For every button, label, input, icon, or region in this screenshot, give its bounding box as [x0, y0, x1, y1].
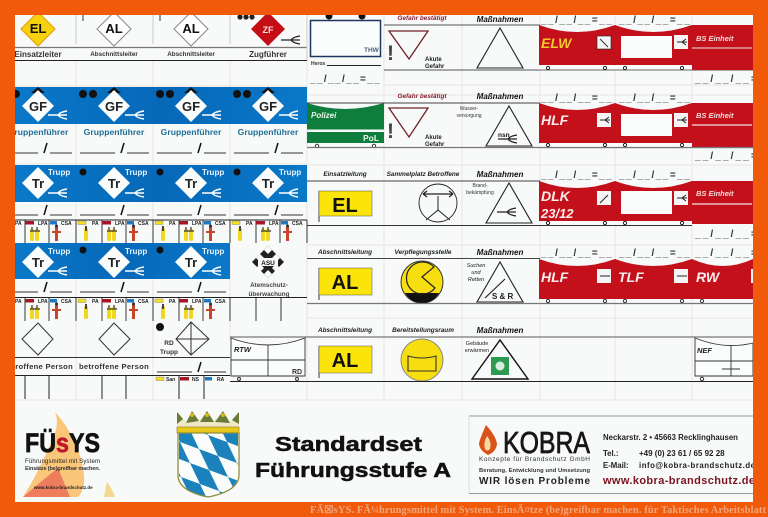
panel: equipment legend row 1: PA [169, 221, 176, 227]
panel: Trupp row 2 [3, 243, 230, 292]
logo: KOBRA block: Beratung, Entwicklung und Umsetzung [479, 468, 590, 474]
logo: FüSYS: FÜsYS [25, 428, 100, 458]
icon: AL diamond: AL [105, 21, 123, 36]
panel: danger block 2: Gefahr [425, 142, 445, 148]
logo: FüSYS: Einsätze (be)greifbar machen. [25, 466, 100, 472]
panel: equipment legend row 1: CSA [138, 221, 149, 227]
icon: AL flag 2: AL [332, 350, 358, 372]
panel: Einsatzleitung block: Sammelplatz Betroffene [387, 171, 460, 178]
panel: equipment legend row 1: CSA [292, 221, 303, 227]
icon: ASU checker diamond: ASU [261, 260, 275, 267]
icon: Trupp 5 [22, 246, 70, 278]
panel: danger block 1: Gefahr bestätigt [397, 15, 447, 22]
panel: HLF vehicle: __/__/__=__ [618, 93, 690, 104]
panel: betroffene Person row [3, 323, 230, 399]
panel: equipment legend row 2: PA [15, 299, 22, 305]
icon: GF 1 [22, 87, 67, 122]
panel: HLF TLF RW vehicles: HLF [541, 269, 569, 285]
panel: danger block 2: nsn [498, 132, 510, 139]
icon: Trupp 6: Tr [108, 255, 120, 270]
panel: RD Trupp: Trupp [160, 349, 178, 356]
logo: FüSYS: www.kobra-brandschutz.de [33, 485, 93, 490]
panel: equipment legend row 2: CSA [215, 299, 226, 305]
icon: person diamond 1 [22, 323, 53, 355]
panel: danger block 2: ! [387, 120, 394, 143]
icon: AL flag 2 [319, 346, 372, 378]
logo: KOBRA block: Konzepte für Brandschutz GmbH [479, 456, 590, 463]
icon: Sammelplatz circle [419, 184, 457, 222]
panel: HLF vehicle: __/__/__= [694, 151, 757, 162]
panel: RTW vehicle: RTW [234, 345, 252, 354]
icon: Trupp 4 [234, 167, 301, 199]
logo: KOBRA block: +49 (0) 23 61 / 65 92 28 [639, 449, 725, 458]
icon: Trupp 1 [22, 167, 70, 199]
icon: AL diamond 2: AL [182, 21, 200, 36]
panel: equipment legend row 2: CSA [61, 299, 72, 305]
panel: HLF TLF RW vehicles [539, 248, 757, 303]
logo: FüSYS: Führungsmittel mit System [25, 459, 100, 465]
icon: Trupp 5: Tr [32, 255, 44, 270]
text: Abschnittsleiter 2: Abschnittsleiter [167, 51, 215, 58]
panel: DLK vehicle: DLK [541, 188, 570, 204]
panel: equipment legend row 2: LPA [38, 299, 48, 305]
panel: RD Trupp: RD [164, 340, 174, 347]
icon: EL flag [319, 191, 372, 222]
logo: KOBRA block: Tel.: [603, 449, 618, 458]
panel: Polizei vehicle [307, 103, 384, 148]
panel: RD Trupp: San [166, 377, 175, 383]
icon: GF 3 [156, 87, 221, 122]
text: Gruppenführer labels [8, 127, 299, 137]
icon: GF 4: GF [259, 99, 277, 114]
panel: top leader row [14, 12, 307, 60]
icon: Trupp 3 [156, 167, 224, 199]
icon: GF 3: GF [182, 99, 200, 114]
icon: GF 1: GF [29, 99, 47, 114]
panel: Einsatzleitung block [307, 170, 540, 226]
panel: Abschnittsleitung block 2: Bereitstellungsraum [392, 327, 454, 334]
logo: FüSYS [23, 412, 115, 497]
panel: danger block 2: Gefahr bestätigt [397, 93, 447, 100]
icon: ASU checker diamond [252, 246, 284, 278]
panel: HLF TLF RW vehicles: RW [696, 269, 721, 285]
panel: equipment legend row 1: PA [15, 221, 22, 227]
panel: ELW vehicle [539, 15, 757, 85]
panel: danger block 1: ! [387, 42, 394, 65]
panel: Abschnittsleitung block 1: Suchen [467, 263, 485, 269]
panel: equipment legend row 1: LPA [115, 221, 125, 227]
panel: ELW vehicle: __/__/__=__ [618, 15, 690, 26]
panel: RD Trupp: RA [217, 377, 225, 383]
panel: equipment legend row 1 [1, 220, 307, 243]
icon: Trupp 1: Tr [32, 176, 44, 191]
icon: EL diamond: EL [30, 21, 46, 36]
caption: FÃ☒sYS. FÃ¼hrungsmittel mit System. EinsÃ¤tze (be)greifbar machen. für Taktisches Arbeitsblatt [310, 504, 766, 516]
icon: Trupp 6: Trupp [125, 247, 147, 256]
icon: Trupp 6 [80, 246, 147, 278]
icon: EL diamond [21, 12, 55, 46]
panel: equipment legend row 1: PA [92, 221, 99, 227]
icon: ZF diamond [237, 12, 300, 46]
text: Einsatzleiter: Einsatzleiter [14, 50, 62, 59]
panel: DLK vehicle: BS Einheit [696, 189, 734, 198]
icon: Trupp 5: Trupp [48, 247, 70, 256]
logo: KOBRA block: www.kobra-brandschutz.de [602, 475, 755, 487]
title: Standardset Führungsstufe A: Standardset [275, 434, 422, 456]
panel: danger block 2 [307, 92, 753, 148]
panel: HLF TLF RW vehicles: __/__/__= [694, 248, 757, 259]
logo: KOBRA block [469, 416, 756, 494]
panel: danger block 2: Wasser- [460, 106, 478, 112]
panel: HLF vehicle: HLF [541, 112, 569, 128]
icon: Bereitstellungsraum circle [401, 339, 443, 381]
panel: equipment legend row 1: LPA [269, 221, 279, 227]
panel: RD Trupp: NS [192, 377, 200, 383]
icon: person diamond 2 [99, 323, 130, 355]
icon: EL flag: EL [332, 195, 358, 217]
panel: Abschnittsleitung block 1: Maßnahmen [477, 248, 523, 257]
panel: ELW vehicle: __/__/__= [694, 74, 757, 85]
panel: HLF vehicle [539, 93, 757, 162]
icon: AL flag: AL [332, 272, 358, 294]
logo: Bavarian coat of arms [176, 411, 241, 499]
panel: danger block 1: Maßnahmen [477, 15, 523, 24]
icon: AL flag [319, 268, 372, 300]
panel: Abschnittsleitung block 2: Abschnittsleitung [317, 327, 372, 334]
title: Standardset Führungsstufe A [255, 434, 451, 482]
panel: RD Trupp [156, 322, 226, 383]
text: Gruppenführer labels: Gruppenführer [8, 127, 69, 137]
panel: Abschnittsleitung block 1: Verpflegungsstelle [395, 249, 452, 256]
text: ELW: ELW [541, 35, 573, 51]
logo: KOBRA block: info@kobra-brandschutz.de [639, 461, 756, 470]
text: Abschnittsleiter 1: Abschnittsleiter [90, 51, 138, 58]
icon: Trupp 4: Tr [262, 176, 274, 191]
panel: equipment legend row 2: CSA [138, 299, 149, 305]
panel: Abschnittsleitung block 1 [307, 248, 753, 304]
panel: Abschnittsleitung block 1: S & R [492, 292, 514, 301]
text: Atemschutzüberwachung: überwachung [249, 291, 290, 298]
panel: Abschnittsleitung block 1: und [471, 270, 482, 276]
logo: KOBRA block: WIR lösen Probleme [479, 476, 590, 487]
text: betroffene Person 1: betroffene Person [3, 362, 73, 371]
text: Gruppenführer labels: Gruppenführer [84, 127, 145, 137]
panel: equipment legend row 2: LPA [115, 299, 125, 305]
logo: KOBRA block: E-Mail: [603, 461, 629, 470]
panel: equipment legend row 2: LPA [192, 299, 202, 305]
panel: THW vehicle: __/__/__=__ [309, 74, 380, 85]
text: Zugführer: Zugführer [249, 50, 287, 59]
text: Gruppenführer labels: Gruppenführer [238, 127, 299, 137]
text: betroffene Person 2: betroffene Person [79, 362, 149, 371]
text: Atemschutzüberwachung: Atemschutz- [250, 282, 288, 289]
icon: AL diamond 2 [160, 12, 208, 46]
panel: danger block 2: Maßnahmen [477, 92, 523, 101]
icon: AL diamond [83, 12, 131, 46]
panel: Einsatzleitung block: Einsatzleitung [323, 171, 367, 178]
panel: DLK vehicle: __/__/__=__ [540, 170, 612, 181]
panel: DLK vehicle [539, 170, 757, 240]
panel: NEF vehicle [695, 338, 753, 381]
panel: RTW vehicle [231, 338, 305, 380]
panel: danger block 1: Akute [425, 57, 442, 63]
panel: danger block 1: Gefahr [425, 64, 445, 70]
logo: KOBRA block: KOBRA [503, 425, 590, 460]
panel: equipment legend row 1: PA [246, 221, 253, 227]
panel: Gruppenführer row [3, 87, 307, 153]
icon: Trupp 7: Trupp [202, 247, 224, 256]
icon: Verpflegung circle [401, 261, 443, 303]
panel: equipment legend row 1: CSA [61, 221, 72, 227]
icon: Trupp 2: Tr [108, 176, 120, 191]
panel: RTW vehicle: RD [292, 369, 302, 376]
panel: Abschnittsleitung block 2: Maßnahmen [477, 326, 523, 335]
icon: Trupp 4: Trupp [279, 168, 301, 177]
panel: DLK vehicle: __/__/__=__ [618, 170, 690, 181]
panel: Abschnittsleitung block 1: Retten [468, 277, 484, 283]
panel: Einsatzleitung block: Maßnahmen [477, 170, 523, 179]
panel: equipment legend row 2 [1, 298, 307, 321]
panel: ELW vehicle: __/__/__=__ [540, 15, 612, 26]
panel: equipment legend row 2: PA [92, 299, 99, 305]
panel: equipment legend row 1: CSA [215, 221, 226, 227]
panel: Abschnittsleitung block 2: erwärmen [465, 348, 489, 354]
panel: Abschnittsleitung block 2 [230, 326, 753, 382]
panel: Trupp row 1 [3, 165, 307, 215]
panel: HLF TLF RW vehicles: __/__/__=__ [618, 248, 690, 259]
logo: KOBRA block: Neckarstr. 2 • 45663 Recklinghausen [603, 433, 738, 442]
icon: Trupp 1: Trupp [48, 168, 70, 177]
panel: equipment legend row 1: LPA [38, 221, 48, 227]
icon: Trupp 3: Trupp [202, 168, 224, 177]
panel: NEF vehicle: NEF [697, 346, 712, 355]
panel: equipment legend row 1: LPA [192, 221, 202, 227]
icon: Trupp 7: Tr [185, 255, 197, 270]
panel: Einsatzleitung block: bekämpfung [466, 190, 494, 196]
icon: Trupp 2: Trupp [125, 168, 147, 177]
icon: GF 2 [79, 87, 144, 122]
panel: Abschnittsleitung block 2: Gebäude [466, 341, 488, 347]
panel: equipment legend row 2: PA [169, 299, 176, 305]
panel: danger block 2: versorgung [456, 113, 482, 119]
icon: Trupp 7 [156, 246, 224, 278]
panel: THW vehicle [309, 12, 381, 85]
panel: HLF TLF RW vehicles: TLF [618, 269, 644, 285]
text: Gruppenführer labels: Gruppenführer [161, 127, 222, 137]
panel: danger block 2: Akute [425, 135, 442, 141]
icon: Trupp 2 [80, 167, 147, 199]
icon: GF 4 [233, 87, 298, 122]
panel: THW vehicle: Heros [311, 61, 325, 67]
panel: DLK vehicle: 23/12 [540, 206, 574, 221]
icon: Trupp 3: Tr [185, 176, 197, 191]
panel: Polizei vehicle: PoL [363, 133, 379, 143]
panel: ELW vehicle: BS Einheit [696, 34, 734, 43]
panel: HLF TLF RW vehicles: __/__/__=__ [540, 248, 612, 259]
panel: HLF vehicle: BS Einheit [696, 111, 734, 120]
panel: THW vehicle: THW [364, 47, 380, 54]
panel: Einsatzleitung block: Brand- [472, 183, 488, 189]
panel: Polizei vehicle: Polizei [311, 111, 337, 120]
icon: GF 2: GF [105, 99, 123, 114]
panel: DLK vehicle: __/__/__= [694, 229, 757, 240]
panel: HLF vehicle: __/__/__=__ [540, 93, 612, 104]
panel: danger block 1 [384, 15, 753, 70]
panel: Abschnittsleitung block 1: Abschnittsleitung [317, 249, 372, 256]
icon: ZF diamond: ZF [262, 25, 274, 35]
title: Standardset Führungsstufe A: Führungsstufe A [255, 460, 451, 482]
